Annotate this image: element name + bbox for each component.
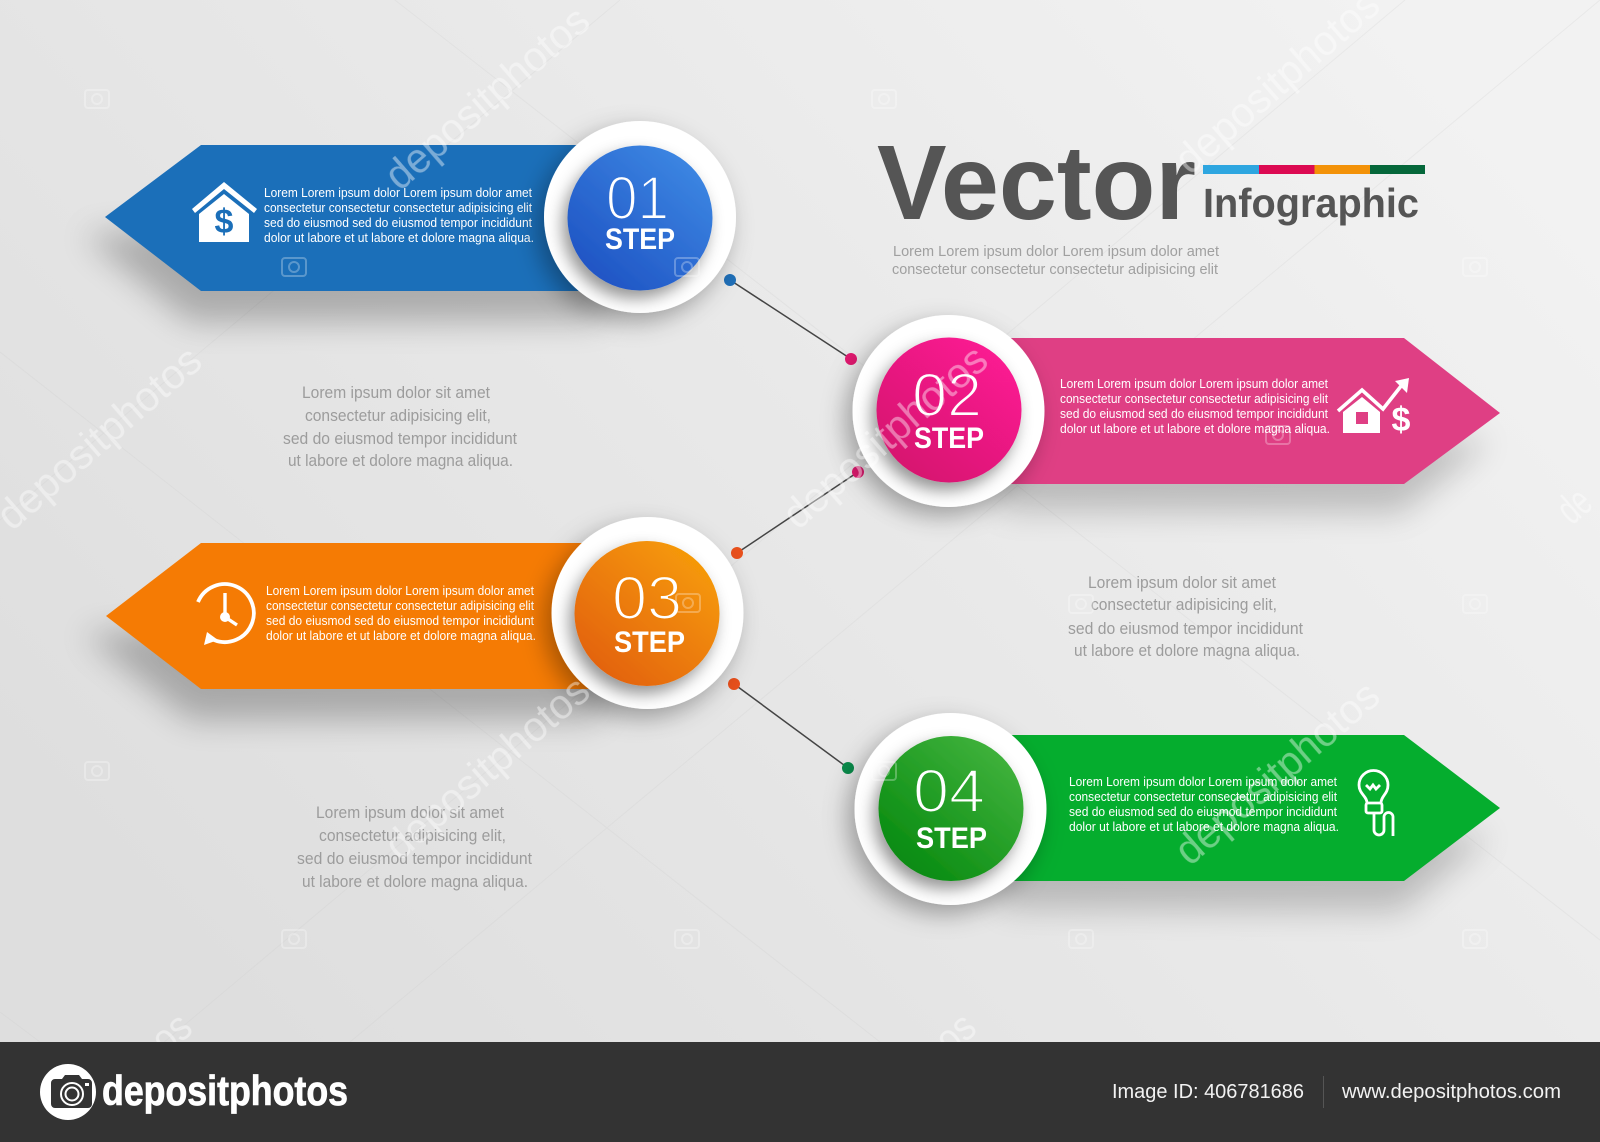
text block: step 4: sed do eiusmod sed do eiusmod tempor incididunt xyxy=(1069,805,1338,819)
watermark camera icons xyxy=(85,90,1487,948)
subtitle text xyxy=(892,244,1219,278)
badge: step 3: STEP xyxy=(614,626,685,659)
badge: step 4: 04 xyxy=(913,757,985,825)
badge: step 4 xyxy=(854,713,1046,905)
title: Vector Infographic: Vector xyxy=(877,124,1196,242)
panel: step 3 xyxy=(84,517,744,720)
banner: step 2 arrow xyxy=(1000,338,1500,484)
banner: step 4 arrow xyxy=(1000,735,1500,881)
title colour bar xyxy=(1203,165,1425,174)
caption text: left lower: sed do eiusmod tempor incididunt xyxy=(297,849,532,868)
caption text: right middle: Lorem ipsum dolor sit amet xyxy=(1088,573,1276,592)
badge: step 1 xyxy=(544,121,736,313)
panel: step 2 xyxy=(852,315,1500,513)
text block: step 3: Lorem Lorem ipsum dolor Lorem ipsum dolor amet xyxy=(266,584,535,598)
icon: camera logo xyxy=(40,1064,96,1120)
caption text: left upper xyxy=(283,383,517,470)
caption text: right middle xyxy=(1068,573,1303,660)
image id: Image ID: 406781686 xyxy=(1112,1081,1304,1103)
text block: step 2: sed do eiusmod sed do eiusmod tempor incididunt xyxy=(1060,407,1329,421)
badge: step 3 xyxy=(552,517,744,709)
caption text: left lower: ut labore et dolore magna aliqua. xyxy=(302,872,528,891)
watermarks: os xyxy=(141,1002,201,1063)
text block: step 4: Lorem Lorem ipsum dolor Lorem ipsum dolor amet xyxy=(1069,775,1338,789)
icon: house with dollar: $ xyxy=(215,203,234,241)
banner: step 1 arrow xyxy=(105,145,600,291)
text block: step 3 xyxy=(266,584,536,643)
badge: step 3: 03 xyxy=(612,564,682,632)
caption text: left lower: Lorem ipsum dolor sit amet xyxy=(316,803,504,822)
text block: step 1 xyxy=(264,186,534,245)
text block: step 3: consectetur consectetur consectetur adipisicing elit xyxy=(266,599,534,613)
icon: house and rising arrow with dollar xyxy=(1338,378,1411,439)
text block: step 2 xyxy=(1060,377,1330,436)
panel: step 1 xyxy=(84,121,736,322)
caption text: right middle: sed do eiusmod tempor incididunt xyxy=(1068,619,1303,638)
watermarks: os xyxy=(925,1002,985,1063)
caption text: left lower: consectetur adipisicing elit, xyxy=(319,826,506,845)
connector: step 1 to step 2 xyxy=(724,274,857,365)
badge: step 2: 02 xyxy=(912,361,982,429)
text block: step 3: dolor ut labore et ut labore et dolore magna aliqua. xyxy=(266,629,536,643)
title: Vector Infographic: Infographic xyxy=(1203,180,1419,226)
caption text: right middle: consectetur adipisicing elit, xyxy=(1091,595,1277,614)
badge: step 2 xyxy=(852,315,1044,507)
banner: step 3 arrow xyxy=(106,543,610,689)
website url: www.depositphotos.com xyxy=(1341,1081,1561,1103)
text block: step 1: consectetur consectetur consectetur adipisicing elit xyxy=(264,201,532,215)
icon: house with dollar xyxy=(192,182,257,242)
caption text: left upper: Lorem ipsum dolor sit amet xyxy=(302,383,490,402)
icon: house and rising arrow with dollar: $ xyxy=(1392,401,1411,439)
text block: step 2: dolor ut labore et ut labore et dolore magna aliqua. xyxy=(1060,422,1330,436)
text block: step 3: sed do eiusmod sed do eiusmod tempor incididunt xyxy=(266,614,535,628)
text block: step 2: consectetur consectetur consectetur adipisicing elit xyxy=(1060,392,1328,406)
icon: clock with return arrow xyxy=(198,584,254,645)
text block: step 4: consectetur consectetur consectetur adipisicing elit xyxy=(1069,790,1337,804)
caption text: left upper: consectetur adipisicing elit, xyxy=(305,406,491,425)
watermarks: depositphotos xyxy=(375,666,598,869)
badge: step 4: STEP xyxy=(916,822,987,855)
subtitle text: Lorem Lorem ipsum dolor Lorem ipsum dolor amet xyxy=(893,244,1219,260)
icon: light bulb with cord xyxy=(1359,770,1393,836)
footer bar xyxy=(0,1042,1600,1142)
text block: step 4: dolor ut labore et ut labore et dolore magna aliqua. xyxy=(1069,820,1339,834)
watermarks: depositphotos xyxy=(1165,671,1388,874)
caption text: left lower xyxy=(297,803,532,891)
watermarks: depositphotos xyxy=(773,335,996,538)
logo wordmark: depositphotos xyxy=(102,1067,348,1114)
panel: step 4 xyxy=(854,713,1500,911)
text block: step 1: Lorem Lorem ipsum dolor Lorem ipsum dolor amet xyxy=(264,186,533,200)
caption text: left upper: ut labore et dolore magna aliqua. xyxy=(288,451,513,470)
connector: step 2 to step 3 xyxy=(731,466,864,559)
text block: step 4 xyxy=(1069,775,1339,834)
badge: step 1: 01 xyxy=(606,164,669,232)
text block: step 1: sed do eiusmod sed do eiusmod tempor incididunt xyxy=(264,216,533,230)
connector: step 3 to step 4 xyxy=(728,678,854,774)
caption text: right middle: ut labore et dolore magna aliqua. xyxy=(1074,641,1300,660)
text block: step 2: Lorem Lorem ipsum dolor Lorem ipsum dolor amet xyxy=(1060,377,1329,391)
title: Vector Infographic xyxy=(877,124,1419,242)
caption text: left upper: sed do eiusmod tempor incididunt xyxy=(283,429,517,448)
text block: step 1: dolor ut labore et ut labore et dolore magna aliqua. xyxy=(264,231,534,245)
badge: step 2: STEP xyxy=(914,422,984,455)
subtitle text: consectetur consectetur consectetur adipisicing elit xyxy=(892,262,1218,278)
badge: step 1: STEP xyxy=(605,223,675,256)
